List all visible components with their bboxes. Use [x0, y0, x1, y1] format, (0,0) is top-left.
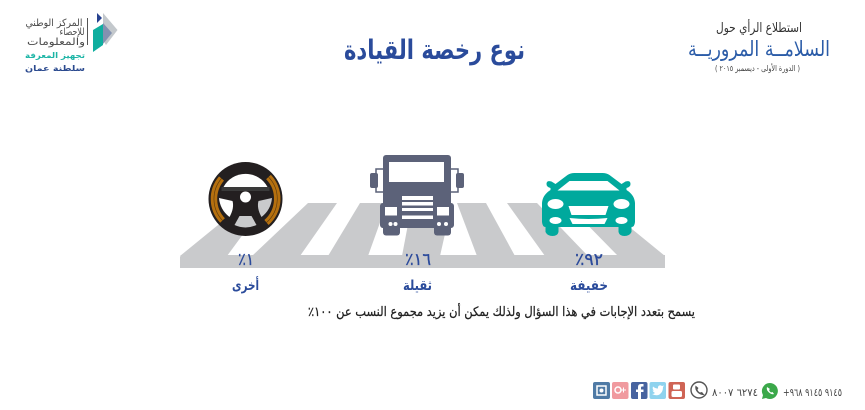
value: ١٦٪: [405, 250, 431, 270]
logo name text: المركز الوطني: [26, 18, 82, 29]
icon: google plus: [612, 382, 628, 399]
value: ١٪: [238, 250, 254, 270]
logo name text: للإحصاء: [60, 27, 84, 38]
stat: light vehicles 92%: [570, 250, 608, 294]
icon: instagram: [593, 382, 610, 399]
title: نوع رخصة القيادة: [344, 35, 525, 66]
survey name: السلامــة المروريــة: [688, 37, 830, 61]
logo country name: سلطنة عمان: [25, 64, 85, 73]
value: ٩٢٪: [575, 250, 603, 270]
icon: facebook: [631, 382, 648, 399]
stat: other 1%: [232, 250, 259, 294]
icon: youtube: [668, 382, 685, 399]
logo: national centre for statistics and information: [25, 13, 118, 73]
logo mark: [93, 13, 118, 52]
stat: heavy vehicles 16%: [403, 250, 432, 294]
label: أخرى: [232, 276, 259, 294]
icon: phone: [691, 382, 707, 398]
survey edition: ( الدورة الأولى - ديسمبر ٢٠١٥ ): [715, 63, 800, 73]
icon: steering wheel: [208, 162, 282, 236]
logo tagline: تجهيز المعرفة: [25, 51, 85, 60]
whatsapp number: +٩٦٨ ٩١٤٥ ٩١٤٥: [783, 387, 842, 399]
footnote: يسمح بتعدد الإجابات في هذا السؤال ولذلك يمكن أن يزيد مجموع النسب عن ١٠٠٪: [308, 303, 695, 320]
survey intro line: استطلاع الرأي حول: [716, 19, 802, 36]
icon: car: [542, 173, 635, 236]
icon: twitter: [650, 382, 666, 399]
label: خفيفة: [570, 278, 608, 294]
icon: whatsapp: [762, 383, 778, 399]
icon: truck: [370, 155, 464, 236]
label: ثقيلة: [403, 278, 432, 294]
footer contacts: [593, 382, 842, 399]
phone number: ٨٠٠٧ ٦٢٧٤: [712, 387, 758, 399]
logo name text: [26, 18, 88, 48]
logo name text: والمعلومات: [27, 37, 85, 48]
zebra crossing: [180, 203, 665, 268]
survey heading: [688, 19, 830, 73]
